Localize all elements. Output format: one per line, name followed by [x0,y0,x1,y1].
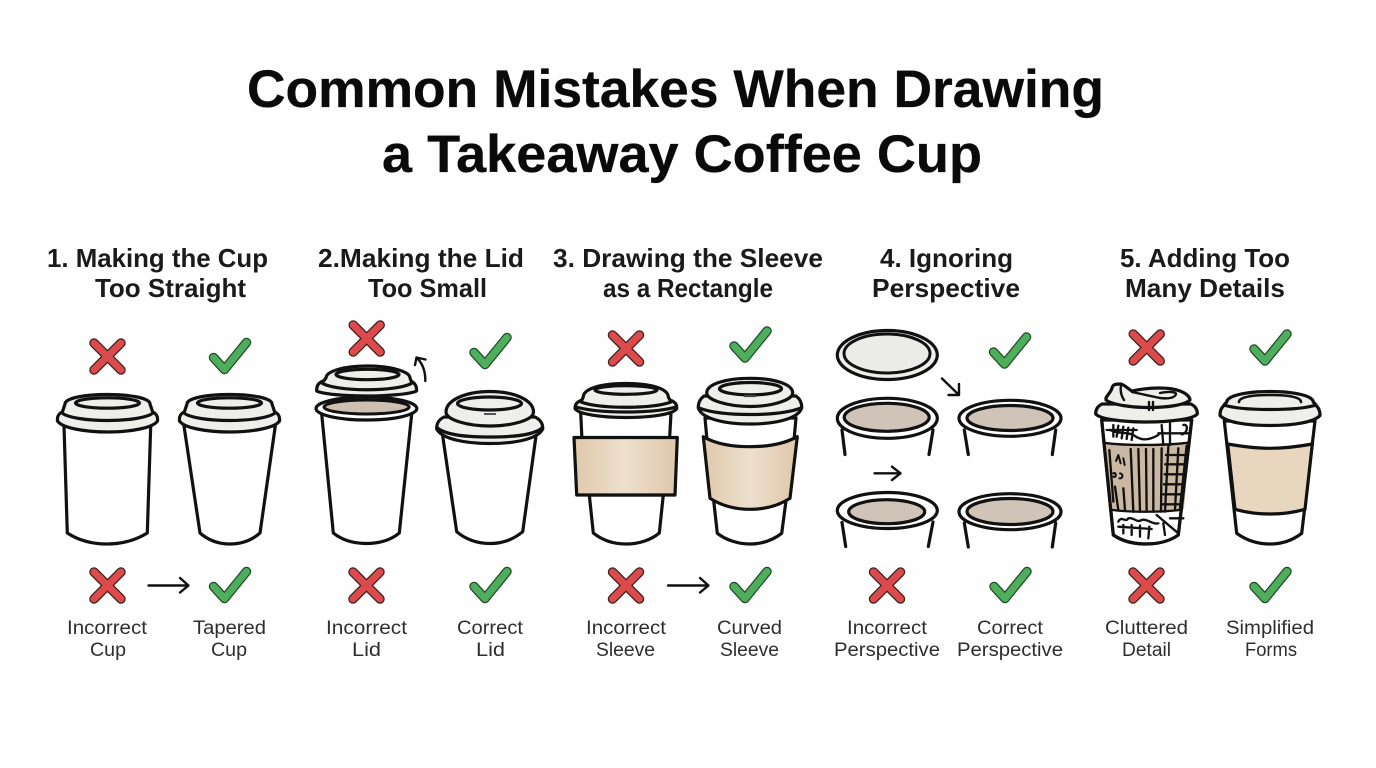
icon: cross top [612,335,640,362]
label: correct perspective [957,618,1063,661]
label: incorrect perspective: Perspective [834,640,940,661]
heading 2 [318,243,524,303]
illustration: rim upper left [837,398,937,454]
icon: cross bottom [94,572,121,599]
label: incorrect sleeve [586,618,667,661]
heading 5: 5. Adding Too [1120,243,1290,273]
label: correct lid [457,618,524,661]
label: correct perspective: Correct [977,618,1044,639]
heading 1 [47,243,268,303]
label: curved sleeve: Curved [717,618,782,639]
arrow [668,578,708,592]
icon: check bottom [214,572,246,598]
label: incorrect perspective [834,618,940,661]
icon: check top [214,342,246,370]
label: correct lid: Correct [457,618,524,639]
illustration: tapered cup [179,394,280,544]
label: incorrect cup [67,618,148,661]
illustration: simplified cup [1220,392,1320,544]
heading 5 [1120,243,1290,303]
label: incorrect cup: Incorrect [67,618,148,639]
icon: check top [1254,334,1287,361]
label: cluttered detail: Cluttered [1105,618,1188,639]
illustration: rim lower right [959,494,1061,547]
icon: cross bottom [612,572,640,599]
label: tapered cup: Cup [211,640,247,661]
label: simplified forms: Forms [1245,640,1297,661]
panel: 2 making the lid too small [316,243,543,661]
arrow: curved up [415,358,426,381]
illustration: cup with correct lid [437,392,543,544]
illustration: rim lower left [837,492,937,546]
icon: check bottom [474,572,507,598]
illustration: cup with rectangle sleeve [574,384,677,544]
title: a Takeaway Coffee Cup [382,125,982,184]
label: tapered cup [193,618,266,661]
heading 2: 2.Making the Lid [318,243,524,273]
label: incorrect lid [326,618,408,661]
heading 5: Many Details [1125,273,1285,303]
label: incorrect lid: Incorrect [326,618,408,639]
icon: check top [474,338,507,364]
icon: check bottom [994,572,1027,598]
label: correct lid: Lid [476,640,505,661]
icon: check top [994,337,1026,364]
illustration: floating lid plate [837,330,937,380]
illustration: cup with curved sleeve [698,378,802,544]
icon: cross top [353,325,380,352]
icon: check top [734,331,767,358]
arrow: diagonal [942,378,959,395]
panel: 3 drawing the sleeve as a rectangle [553,243,823,661]
icon: cross bottom [1133,572,1160,599]
label: incorrect sleeve: Sleeve [596,640,655,661]
label: tapered cup: Tapered [193,618,266,639]
arrow [148,578,188,592]
label: curved sleeve [717,618,782,661]
heading 4 [872,243,1020,303]
title [247,60,1104,184]
panel: 5 adding too many details [1096,243,1320,661]
label: incorrect cup: Cup [90,640,126,661]
icon: cross bottom [353,572,380,599]
label: cluttered detail: Detail [1122,640,1171,661]
illustration: straight cup [57,394,158,544]
illustration: rim upper right [959,400,1061,454]
heading 3: as a Rectangle [603,273,773,303]
arrow: horizontal [874,467,900,480]
heading 1: Too Straight [95,273,246,303]
panel: 1 making the cup too straight [47,243,280,661]
illustration: cup with small lid [316,366,417,544]
label: simplified forms: Simplified [1226,618,1314,639]
title: Common Mistakes When Drawing [247,60,1104,119]
icon: cross top [1133,334,1160,361]
label: incorrect sleeve: Incorrect [586,618,667,639]
heading 3: 3. Drawing the Sleeve [553,243,823,273]
illustration: cluttered cup [1096,384,1197,544]
label: simplified forms [1226,618,1314,661]
label: incorrect perspective: Incorrect [847,618,928,639]
icon: cross bottom [874,572,900,599]
icon: check bottom [1254,572,1287,598]
icon: check bottom [734,572,767,598]
heading 3 [553,243,823,303]
label: cluttered detail [1105,618,1188,661]
label: curved sleeve: Sleeve [720,640,779,661]
heading 2: Too Small [368,273,487,303]
icon: cross top [94,343,121,370]
heading 1: 1. Making the Cup [47,243,268,273]
panel: 4 ignoring perspective [834,243,1063,661]
heading 4: 4. Ignoring [880,243,1013,273]
heading 4: Perspective [872,273,1020,303]
label: incorrect lid: Lid [352,640,381,661]
label: correct perspective: Perspective [957,640,1063,661]
